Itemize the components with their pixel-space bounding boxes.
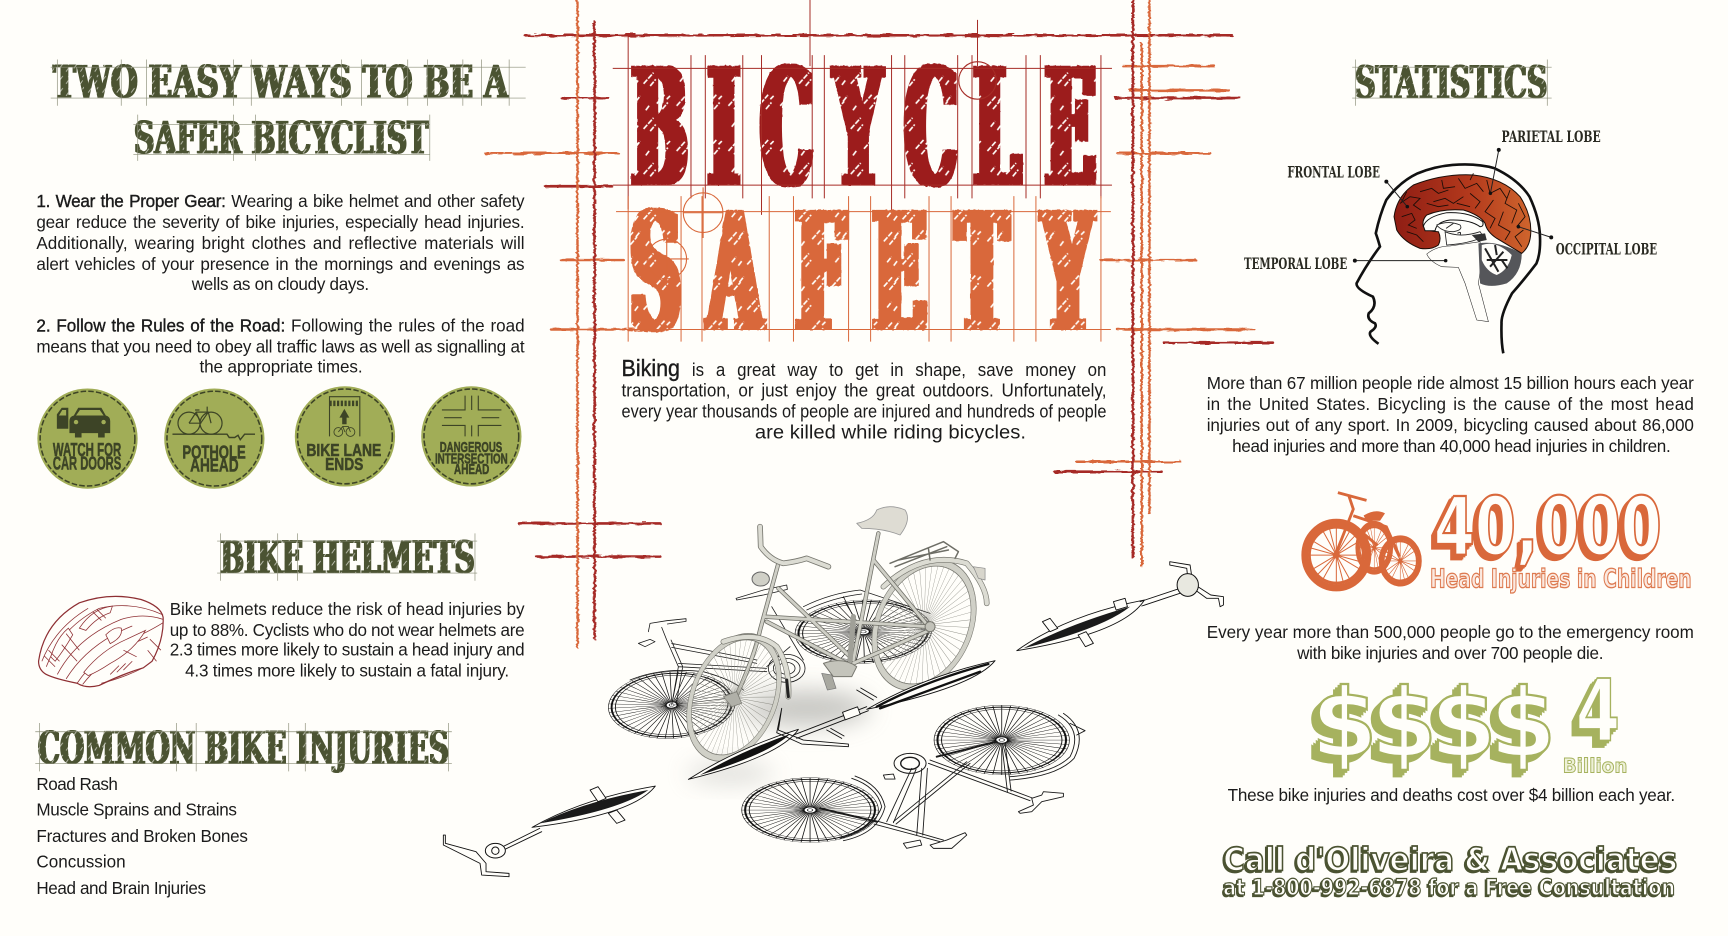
intro paragraph: every year thousands of people are injured and hundreds of people: [622, 402, 1106, 422]
heading: statistics: STATISTICS: [1355, 56, 1547, 109]
text: statistics: in the United States. Bicycling is the cause of the most head: [1207, 395, 1694, 414]
brain labels: TEMPORAL LOBE: [1244, 254, 1347, 273]
sign: dangerous intersection ahead: INTERSECTION: [435, 451, 508, 467]
list: common injuries: Head and Brain Injuries: [36, 879, 206, 898]
sign: pothole ahead: POTHOLE: [182, 441, 246, 462]
bike behind, line drawing: [607, 585, 933, 742]
sign: pothole ahead: [164, 388, 264, 489]
heading: bike helmets: [217, 531, 477, 584]
sketch guide lines around title: [485, 0, 1273, 647]
heading: common bike injuries: COMMON BIKE INJURIES: [38, 722, 449, 775]
sign: bike lane ends: BIKE LANE: [306, 440, 381, 460]
stat: $4 billion: $$$$: [1311, 669, 1556, 779]
text: proper gear: Additionally, wearing bright clothes and reflective materials will: [36, 234, 525, 253]
text: rules of the road: the appropriate times.: [199, 357, 363, 376]
cerebellum: [1478, 243, 1522, 286]
bicycle illustration: [443, 507, 1223, 877]
text: helmets: up to 88%. Cyclists who do not wear helmets are: [170, 621, 525, 640]
text: statistics: injuries out of any sport. In 2009, bicycling caused about 86,000: [1207, 416, 1694, 435]
title: BICYCLE: BICYCLE: [633, 33, 1095, 222]
text: statistics: More than 67 million people ride almost 15 billion hours each year: [1207, 374, 1694, 393]
text: helmets: [170, 600, 525, 681]
sign: bike lane ends: [295, 386, 395, 487]
brain labels: [1244, 127, 1657, 273]
icon: bike helmet: [39, 596, 163, 687]
heading: two easy ways: SAFER BICYCLIST: [134, 112, 428, 165]
text: helmets: 4.3 times more likely to sustain a fatal injury.: [185, 662, 509, 681]
sign: watch for car doors: [37, 388, 138, 489]
sign: watch for car doors: CAR DOORS: [53, 452, 121, 473]
text: emergency room: [1207, 623, 1694, 663]
brain labels: PARIETAL LOBE: [1502, 127, 1601, 146]
intro paragraph: transportation, or just enjoy the great outdoors. Unfortunately,: [622, 381, 1106, 401]
text: emergency room: Every year more than 500,000 people go to the emergency room: [1207, 623, 1694, 642]
bike standing, grey: [669, 507, 996, 775]
text: proper gear: [36, 192, 525, 294]
cortex: [1394, 175, 1531, 253]
icon: tricycle: [1308, 493, 1418, 585]
corpus callosum: [1423, 213, 1483, 231]
heading: statistics: [1352, 56, 1552, 109]
heading: bike helmets: BIKE HELMETS: [220, 531, 475, 584]
call to action: Call d'Oliveira & Associates: [1223, 841, 1677, 879]
top view bike: upper right: [1017, 562, 1223, 651]
list: common injuries: Fractures and Broken Bones: [36, 827, 248, 846]
text: cost: These bike injuries and deaths cost over $4 billion each year.: [1228, 786, 1675, 805]
heading: common bike injuries: [35, 722, 452, 775]
text: proper gear: gear reduce the severity of bike injuries, especially head injuries.: [36, 213, 525, 232]
text: statistics: [1207, 374, 1694, 456]
text: proper gear: alert vehicles of your presence in the mornings and evenings as: [36, 255, 525, 274]
sulci: [1400, 173, 1525, 247]
stat: $4 billion: Billion: [1563, 755, 1627, 778]
sign: dangerous intersection ahead: [421, 386, 521, 487]
text: proper gear: wells as on cloudy days.: [191, 275, 369, 294]
heading: two easy ways: TWO EASY WAYS TO BE A: [53, 56, 509, 109]
sign: watch for car doors: WATCH FOR: [53, 439, 122, 460]
head outline: [1357, 164, 1540, 353]
list: common injuries: Road Rash: [36, 775, 118, 794]
side bike lying, line drawing: [742, 705, 1085, 848]
sign: pothole ahead: AHEAD: [190, 455, 239, 476]
stat: $4 billion: 4: [1576, 662, 1620, 762]
sign: dangerous intersection ahead: AHEAD: [454, 462, 489, 478]
text: emergency room: with bike injuries and over 700 people die.: [1296, 644, 1603, 663]
top view bike: center: [688, 661, 995, 779]
text: helmets: 2.3 times more likely to sustain a head injury and: [170, 641, 525, 660]
text: statistics: head injuries and more than 40,000 head injuries in children.: [1232, 437, 1671, 456]
leader lines: [1355, 150, 1551, 261]
text: rules of the road: means that you need to obey all traffic laws as well as signalling at: [36, 338, 525, 357]
brainstem and temporal: [1427, 242, 1488, 322]
list: common injuries: Concussion: [36, 852, 126, 871]
list: common injuries: Muscle Sprains and Strains: [36, 801, 237, 820]
list: common injuries: [36, 775, 248, 898]
call to action: [1223, 841, 1677, 901]
intro paragraph: [622, 355, 1106, 444]
diagram: brain: [1244, 127, 1657, 353]
text: helmets: Bike helmets reduce the risk of head injuries by: [170, 600, 525, 619]
heading: two easy ways: [51, 56, 526, 165]
sign: bike lane ends: ENDS: [325, 454, 364, 474]
intro paragraph: are killed while riding bicycles.: [755, 422, 1026, 444]
title: SAFETY: SAFETY: [631, 178, 1092, 368]
text: rules of the road: [36, 317, 525, 376]
text: rules of the road: 2. Follow the Rules of the Road: Following the rules of the road: [36, 317, 525, 336]
top view bike: lower left: [443, 786, 655, 877]
text: proper gear: 1. Wear the Proper Gear: Wearing a bike helmet and other safety: [36, 192, 525, 211]
sign: dangerous intersection ahead: DANGEROUS: [440, 440, 502, 456]
brain labels: OCCIPITAL LOBE: [1556, 240, 1657, 259]
intro paragraph: Biking is a great way to get in shape, save money on: [622, 355, 1106, 381]
brain labels: FRONTAL LOBE: [1287, 162, 1380, 181]
